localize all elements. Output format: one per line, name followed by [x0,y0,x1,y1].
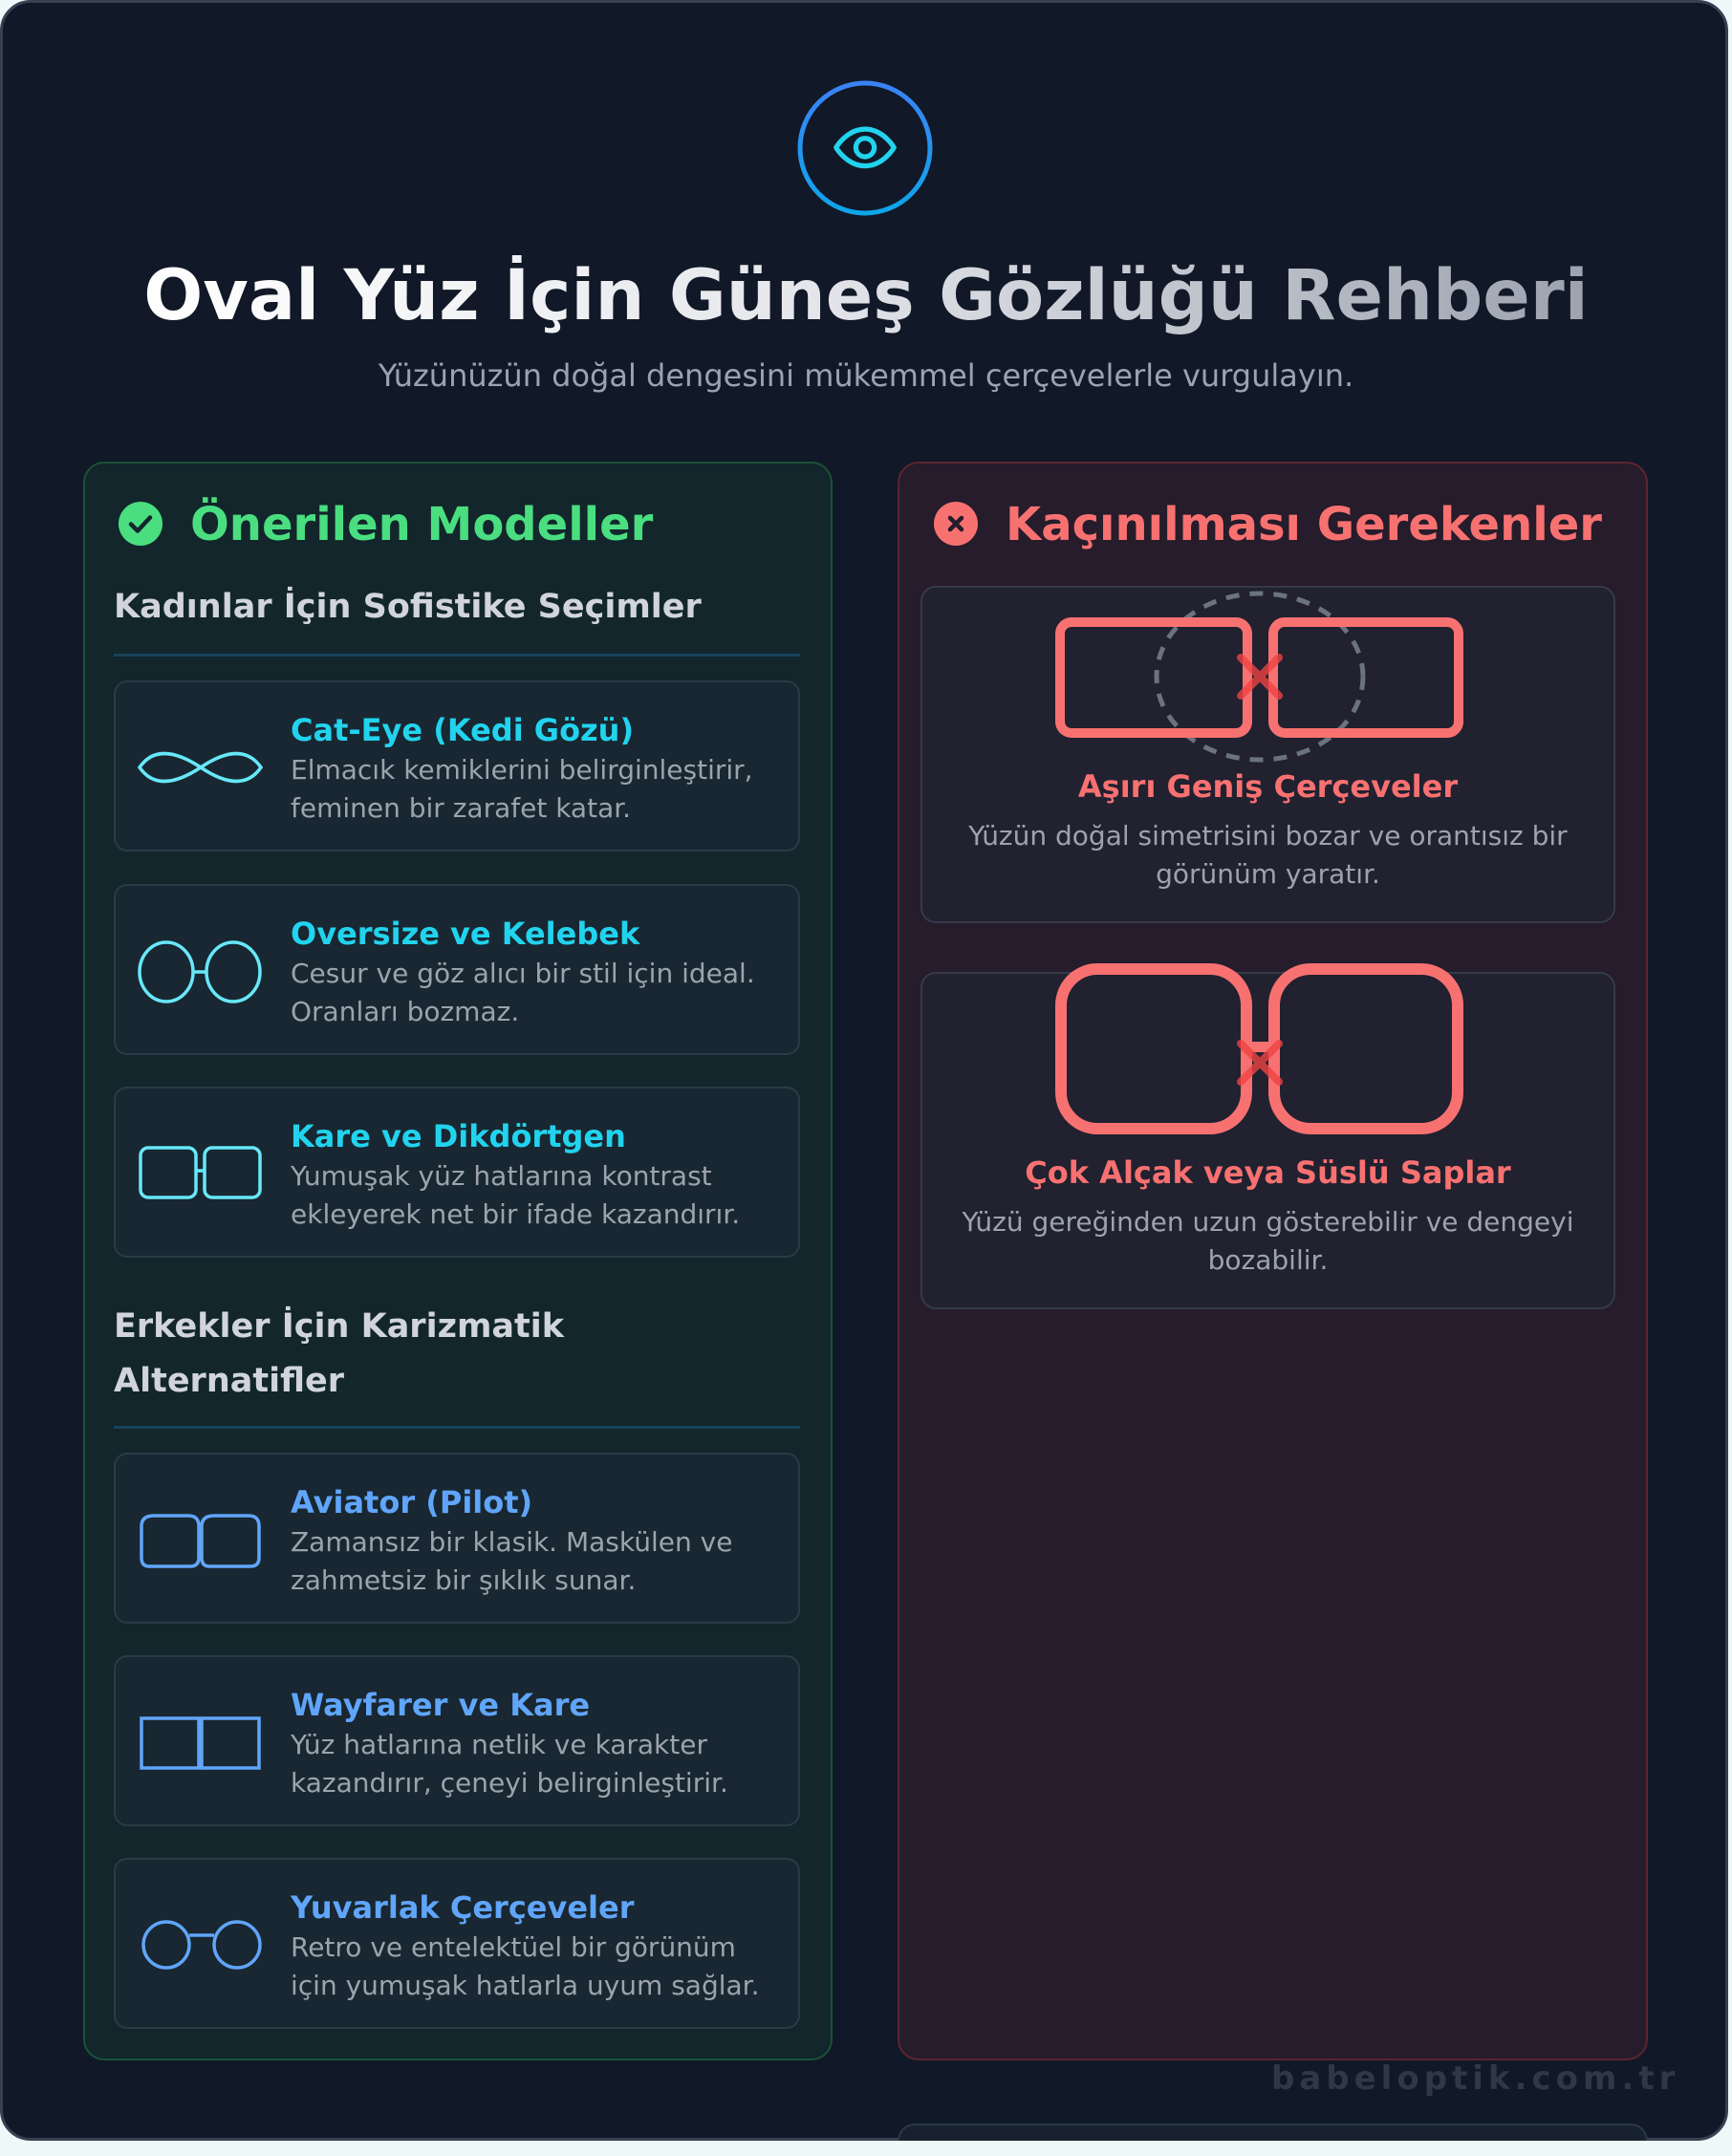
card: Oversize [114,884,800,1055]
card: Oversize: Oversize ve Kelebek [291,916,639,952]
card: wide frames: Yüzün doğal simetrisini bozar ve orantısız bir [968,820,1568,852]
card: wide frames: Aşırı Geniş Çerçeveler [1078,768,1458,805]
card: Cat-Eye: feminen bir zarafet katar. [291,792,631,824]
card: Wayfarer [114,1655,800,1826]
icon: oversize glasses [138,940,262,1003]
subheading: men: Erkekler İçin Karizmatik [114,1307,564,1346]
title: Oval Yüz İçin Güneş Gözlüğü Rehberi [143,255,1589,336]
icon: wayfarer glasses [140,1716,261,1770]
icon: aviator glasses [140,1514,261,1568]
icon: oversized frames with dashed face [1055,591,1463,763]
card: Cat-Eye: Cat-Eye (Kedi Gözü) [291,712,634,748]
card: Yuvarlak: Retro ve entelektüel bir görünüm [291,1931,736,1963]
card: Cat-Eye: Elmacık kemiklerini belirginleştirir, [291,754,753,786]
card: Aviator: zahmetsiz bir şıklık sunar. [291,1564,636,1596]
card: wide frames: görünüm yaratır. [1156,858,1380,890]
heading: Kaçınılması Gerekenler: Kaçınılması Gerekenler [1006,498,1602,551]
card: low temples [920,972,1615,1309]
icon: check [119,502,162,546]
card: Yuvarlak: Yuvarlak Çerçeveler [291,1889,635,1926]
icon: square glasses [139,1146,262,1199]
card: Cat-Eye [114,680,800,852]
card: Aviator [114,1453,800,1624]
card: Kare ve Dikdörtgen [114,1087,800,1258]
card: Kare ve Dikdörtgen: ekleyerek net bir ifade kazandırır. [291,1198,740,1230]
card: Wayfarer: Yüz hatlarına netlik ve karakter [291,1729,707,1760]
subheading: men [114,1305,565,1400]
card: Oversize: Oranları bozmaz. [291,996,519,1027]
card: Kare ve Dikdörtgen: Yumuşak yüz hatlarına kontrast [291,1160,712,1192]
card: wide frames [920,586,1615,923]
panel: avoid [898,462,1648,2060]
card: low temples: Yüzü gereğinden uzun gösterebilir ve dengeyi [962,1206,1574,1238]
card: Wayfarer: kazandırır, çeneyi belirginleştirir. [291,1767,728,1799]
card: Yuvarlak [114,1858,800,2029]
bottom stub card [898,2124,1648,2141]
watermark: babeloptik.com.tr [1271,2059,1679,2098]
card: low temples: bozabilir. [1208,1244,1328,1276]
icon: eye badge [797,80,933,216]
card: Yuvarlak: için yumuşak hatlarla uyum sağlar. [291,1970,760,2001]
icon: cat-eye glasses [138,751,263,784]
subtitle: Yüzünüzün doğal dengesini mükemmel çerçevelerle vurgulayın. [379,357,1353,394]
subheading: men: Alternatifler [114,1362,344,1400]
heading: Önerilen Modeller: Önerilen Modeller [190,498,653,551]
icon: x badge [934,502,978,546]
panel: recommended models [83,462,833,2060]
card: low temples: Çok Alçak veya Süslü Saplar [1025,1154,1511,1191]
card: Oversize: Cesur ve göz alıcı bir stil için ideal. [291,958,755,989]
card: Aviator: Aviator (Pilot) [291,1484,532,1520]
icon: tall frames [1055,963,1463,1134]
card: Wayfarer: Wayfarer ve Kare [291,1687,590,1723]
card: Kare ve Dikdörtgen: Kare ve Dikdörtgen [291,1118,626,1154]
icon: round glasses [141,1920,262,1970]
subheading: women: Kadınlar İçin Sofistike Seçimler [114,588,702,626]
card: Aviator: Zamansız bir klasik. Maskülen ve [291,1526,732,1558]
